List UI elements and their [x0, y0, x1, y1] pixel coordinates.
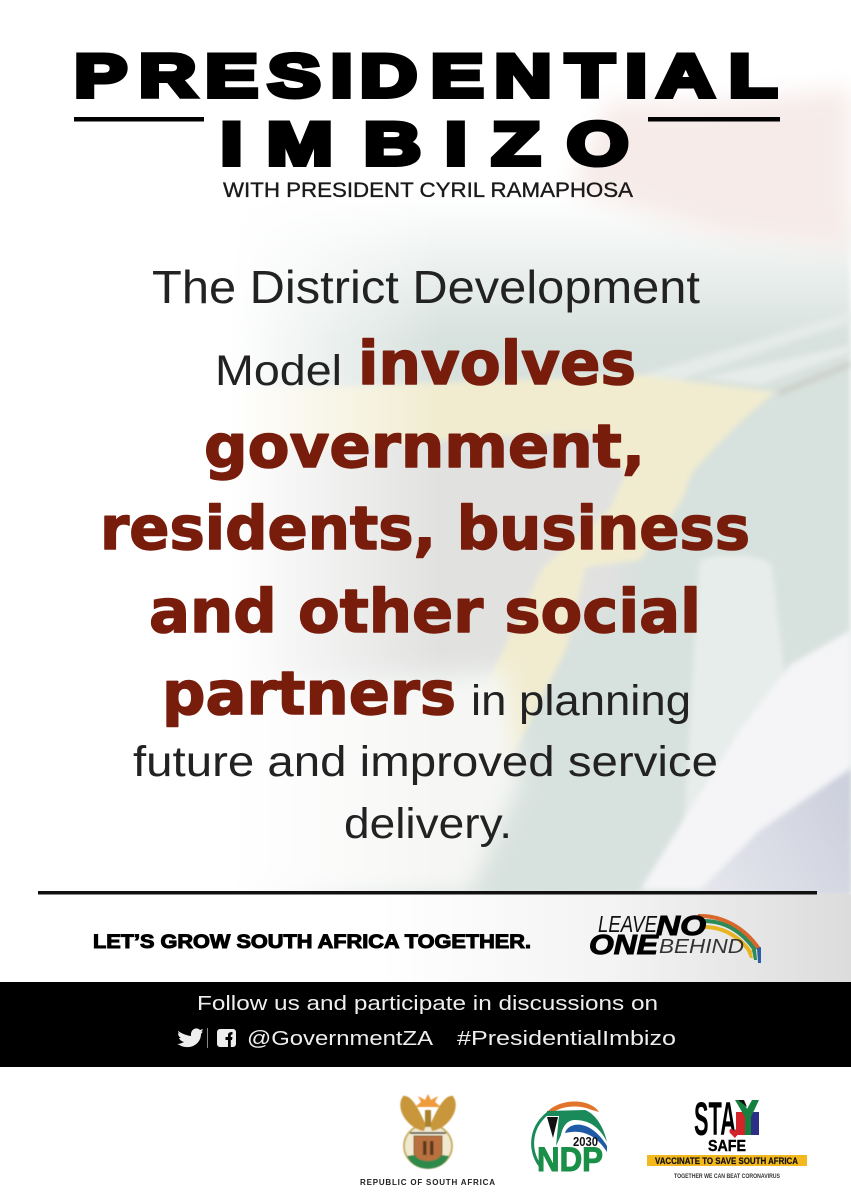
logo: Stay Safe: STA [694, 1092, 736, 1145]
subtitle: WITH PRESIDENT CYRIL RAMAPHOSA [223, 179, 633, 202]
main statement: future and improved service [133, 738, 718, 786]
logo: Leave No One Behind: ONE [589, 929, 659, 960]
logo: Stay Safe: VACCINATE TO SAVE SOUTH AFRICA [655, 1156, 798, 1167]
main statement: government, [204, 412, 645, 482]
title rule right [648, 117, 780, 122]
main statement: delivery. [344, 800, 512, 848]
tagline: LET’S GROW SOUTH AFRICA TOGETHER. [93, 932, 531, 953]
main statement: involves [358, 329, 636, 399]
title rule left [74, 117, 204, 122]
divider [38, 891, 817, 894]
logo: Leave No One Behind: LEAVE [598, 911, 658, 937]
logo: coat of arms [400, 1094, 456, 1169]
main statement: and other social [149, 577, 701, 647]
main statement: residents, business [100, 494, 750, 564]
main statement: The District Development [152, 261, 700, 313]
title line: IMBIZO: IMBIZO [221, 110, 629, 177]
logo: Leave No One Behind: BEHIND [659, 936, 744, 958]
main statement: Model [215, 347, 342, 395]
logo: Stay Safe: SAFE [708, 1138, 746, 1155]
social band [0, 982, 851, 1067]
logo: Leave No One Behind [589, 910, 761, 963]
handle: @GovernmentZA [247, 1028, 434, 1050]
logo: Stay Safe: TOGETHER WE CAN BEAT CORONAVIRUS [674, 1174, 780, 1180]
icon: twitter [177, 1028, 203, 1047]
logo: Leave No One Behind: NO [656, 910, 706, 941]
separator [207, 1028, 208, 1048]
footer [0, 1067, 851, 1200]
follow text: Follow us and participate in discussions on [197, 993, 658, 1015]
flag Y [735, 1100, 759, 1135]
icon: facebook [217, 1029, 236, 1047]
label: Republic of South Africa: REPUBLIC OF SOUTH AFRICA [360, 1178, 495, 1187]
logo: Stay Safe [647, 1092, 807, 1180]
logo: NDP 2030 [533, 1102, 607, 1179]
main statement [100, 261, 750, 848]
main statement: partners [162, 659, 456, 729]
logo: NDP 2030: 2030 [573, 1134, 598, 1149]
hashtag: #PresidentialImbizo [457, 1028, 676, 1050]
rainbow arcs [698, 916, 759, 953]
title: Presidential Imbizo [74, 42, 780, 177]
main statement: in planning [471, 677, 691, 725]
title line: PRESIDENTIAL: PRESIDENTIAL [74, 42, 777, 109]
logo: NDP 2030: NDP [537, 1141, 603, 1179]
